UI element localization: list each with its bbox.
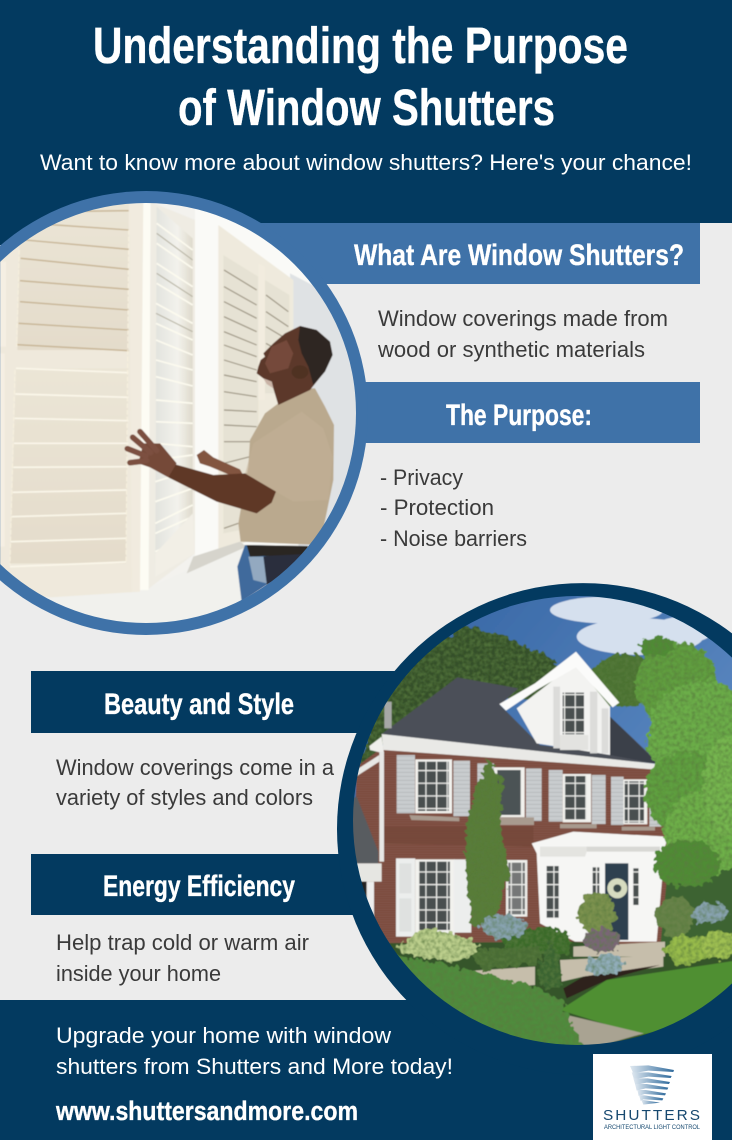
heading: beauty and style: Beauty and Style xyxy=(104,688,294,721)
garden path xyxy=(560,1013,644,1046)
light gap xyxy=(140,203,150,590)
ground base xyxy=(373,942,732,1047)
head xyxy=(257,326,333,405)
upper floor windows xyxy=(415,759,647,824)
mulch xyxy=(563,965,660,998)
main roof xyxy=(382,677,660,764)
circle ring: interior photo xyxy=(0,191,368,635)
icon: louvers xyxy=(630,1065,674,1105)
juniper bed xyxy=(390,957,581,1047)
sill xyxy=(187,542,247,573)
window sills xyxy=(409,815,655,831)
hair xyxy=(298,326,333,385)
upper floor shutters xyxy=(397,755,662,827)
chimney pipe xyxy=(384,702,392,728)
footer call to action xyxy=(56,1023,453,1079)
photo: man opening interior shutters xyxy=(0,203,356,623)
title xyxy=(93,17,628,136)
text: what are window shutters: Window coverings made from xyxy=(378,306,668,331)
text: beauty and style: variety of styles and colors xyxy=(56,785,313,810)
dark shrubs by house xyxy=(500,927,572,957)
text: what are window shutters: wood or synthetic materials xyxy=(377,337,645,362)
hand xyxy=(127,432,177,477)
text: energy efficiency: Help trap cold or warm air xyxy=(56,930,309,955)
left wing xyxy=(353,796,382,917)
heading bar: the purpose xyxy=(300,382,700,443)
shirt xyxy=(238,388,334,545)
steps and walkways xyxy=(473,942,665,987)
blue spruce xyxy=(479,915,527,939)
lawn xyxy=(560,960,732,1035)
footer call to action: Upgrade your home with window xyxy=(56,1023,391,1048)
footer band xyxy=(0,1000,732,1140)
right shutter xyxy=(218,225,293,553)
far hand xyxy=(196,450,243,475)
cone bush xyxy=(536,940,563,991)
arm xyxy=(168,463,276,513)
photo: brick house with shutters xyxy=(340,580,732,1047)
hedge xyxy=(468,947,540,971)
brick wall xyxy=(353,747,670,950)
eave xyxy=(382,734,662,770)
blue spruce right xyxy=(692,903,728,924)
list: purposes: - Privacy xyxy=(380,465,463,490)
list: purposes xyxy=(380,465,527,551)
blue spruce lower xyxy=(586,954,624,976)
text: beauty and style xyxy=(56,755,335,810)
yellow-green bushes xyxy=(666,935,707,965)
climbing tree xyxy=(465,757,510,927)
website: www.shuttersandmore.com xyxy=(55,1096,358,1126)
title: of Window Shutters xyxy=(178,79,555,136)
middle shutter xyxy=(149,202,195,589)
header band xyxy=(0,0,732,245)
text: energy efficiency: inside your home xyxy=(56,961,221,986)
footer call to action: shutters from Shutters and More today! xyxy=(56,1054,453,1079)
man xyxy=(127,326,334,602)
heading: the purpose: The Purpose: xyxy=(446,399,592,432)
downspout xyxy=(379,752,384,862)
subtitle: Want to know more about window shutters? Here's your chance! xyxy=(40,150,692,175)
right foreground tree xyxy=(635,637,732,887)
heading bar: beauty and style xyxy=(31,671,431,733)
cheek highlight xyxy=(265,340,293,373)
flowering shrub right xyxy=(657,896,693,937)
list: purposes: - Noise barriers xyxy=(380,526,527,551)
garden plantings xyxy=(390,893,732,1047)
heading bar: energy efficiency xyxy=(31,854,431,915)
text: beauty and style: Window coverings come in a xyxy=(56,755,335,780)
hydrangeas xyxy=(395,928,480,962)
purple shrub xyxy=(583,928,620,952)
logo tagline: ARCHITECTURAL LIGHT CONTROL xyxy=(604,1124,700,1131)
text: what are window shutters xyxy=(377,306,668,362)
ear xyxy=(292,365,308,379)
text: energy efficiency xyxy=(56,930,309,986)
yellow-green bushes right xyxy=(701,931,732,959)
jeans xyxy=(236,544,268,600)
clouds xyxy=(550,597,713,655)
logo xyxy=(593,1054,712,1140)
circle ring: house photo xyxy=(337,583,732,1075)
face and neck xyxy=(257,326,332,405)
dark backing to the right of the house xyxy=(660,867,732,957)
lower floor shutters and windows xyxy=(396,858,527,937)
logo wordmark: SHUTTERS xyxy=(603,1107,702,1124)
left shutter xyxy=(0,200,143,597)
dark background trees xyxy=(360,625,663,767)
belt xyxy=(247,545,308,557)
list: purposes: - Protection xyxy=(380,495,494,520)
heading: energy efficiency: Energy Efficiency xyxy=(103,870,295,903)
heading bar: what are window shutters xyxy=(200,223,700,284)
dormer xyxy=(499,652,619,755)
flowering shrub xyxy=(577,893,616,934)
neck highlight xyxy=(263,378,273,388)
porch xyxy=(532,832,668,942)
